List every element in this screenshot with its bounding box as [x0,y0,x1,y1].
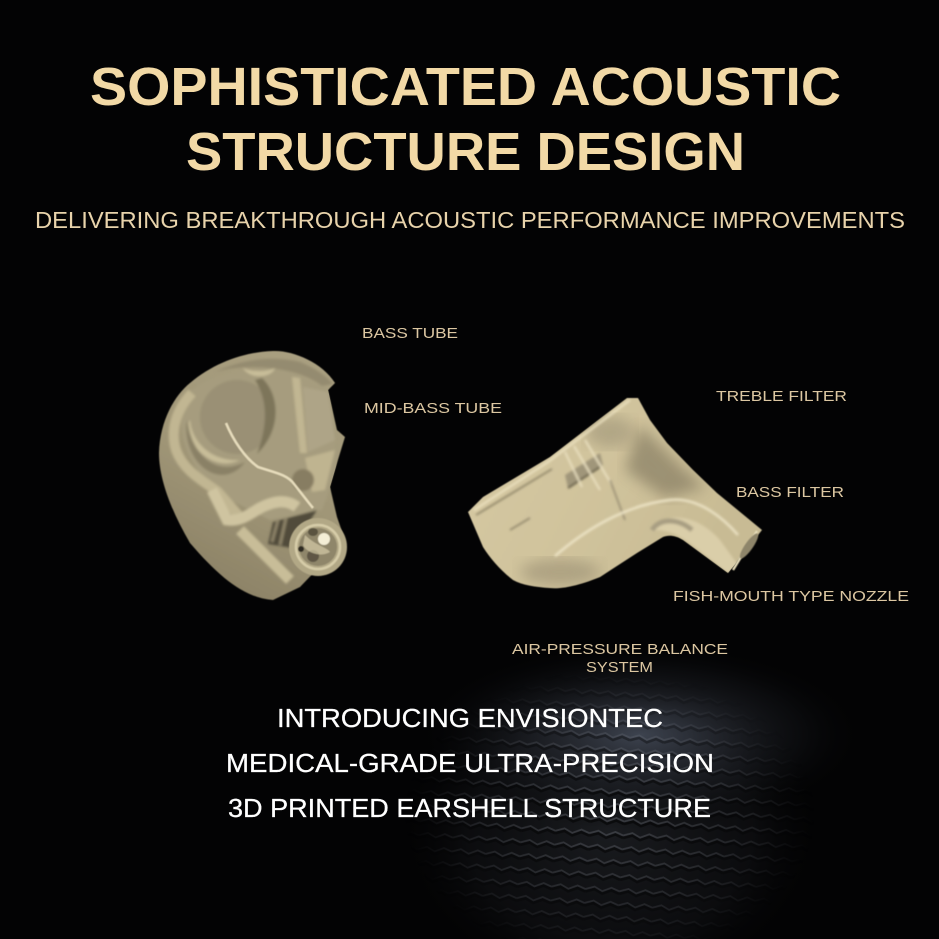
title: SOPHISTICATED ACOUSTIC [90,57,841,117]
label: mid-bass tube: MID-BASS TUBE [364,400,502,417]
label: air-pressure balance system: AIR-PRESSURE BALANCE [512,641,728,658]
thin wire [226,423,313,508]
label: bass tube: BASS TUBE [362,325,458,342]
label: air-pressure balance system: SYSTEM [586,659,653,676]
label: fish-mouth nozzle: FISH-MOUTH TYPE NOZZLE [673,588,909,605]
nozzle tip [733,531,757,570]
subtitle: DELIVERING BREAKTHROUGH ACOUSTIC PERFORMANCE IMPROVEMENTS [35,207,905,233]
dim rear shading [625,425,705,498]
earshell: left view [159,351,347,600]
earshell: right view [468,398,762,588]
label: air-pressure balance system [512,641,728,676]
labels [362,325,909,676]
bottom statement: 3D PRINTED EARSHELL STRUCTURE [228,795,711,823]
carbon fibre texture [432,692,788,936]
background light glow [250,600,939,939]
label: bass filter: BASS FILTER [736,484,844,501]
title [90,57,841,182]
label: treble filter: TREBLE FILTER [716,388,847,405]
bottom statement: MEDICAL-GRADE ULTRA-PRECISION [226,750,714,778]
nozzle ring [289,518,347,576]
title: STRUCTURE DESIGN [186,122,745,182]
bottom statement [226,705,714,823]
bottom statement: INTRODUCING ENVISIONTEC [277,705,663,733]
inner chamber [193,388,338,519]
